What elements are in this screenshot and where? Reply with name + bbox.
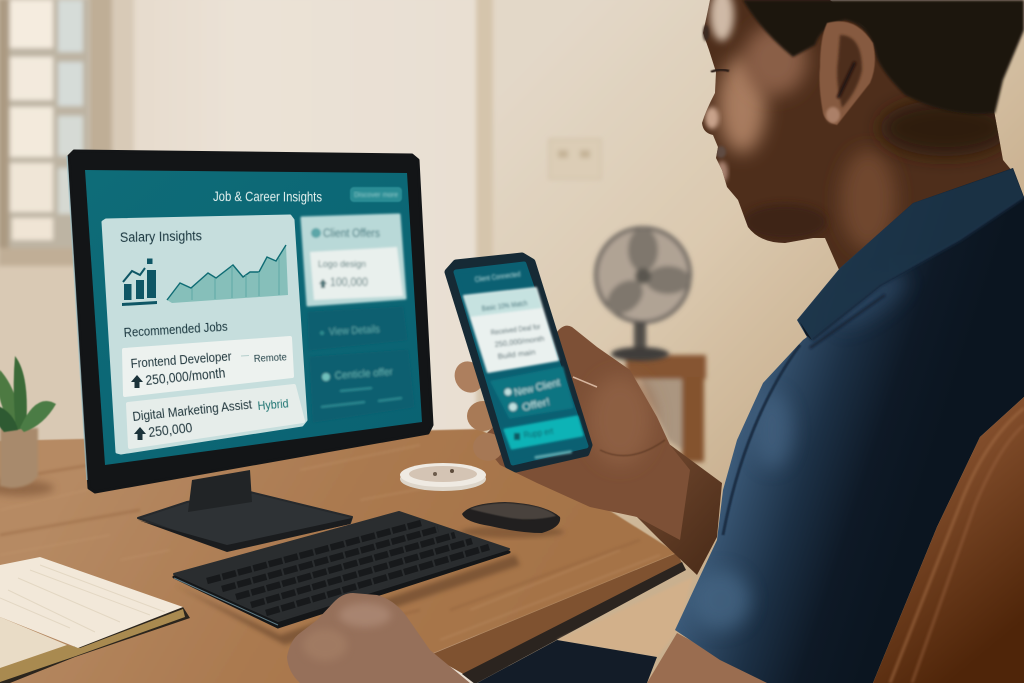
chair: [873, 397, 1024, 683]
phone body: [448, 256, 589, 469]
panel: client offers: Client Offers: [323, 228, 380, 240]
desk fan: [596, 228, 690, 361]
monitor screen: [85, 170, 422, 465]
phone message card: Build main: [497, 347, 536, 361]
phone: [448, 256, 589, 469]
job card: Digital Marketing Assist: Hybrid: [257, 396, 289, 413]
heading: Salary Insights: Salary Insights: [120, 228, 202, 245]
keyboard shadow: [175, 555, 520, 645]
desk surface: [0, 429, 686, 683]
icon: bar chart: [122, 258, 157, 306]
forearm: [630, 430, 722, 575]
lower arm: [647, 633, 770, 683]
panel: centicle offer: [311, 351, 413, 421]
eyebrow: [703, 25, 709, 41]
phone new client card: New Client: [513, 377, 562, 399]
header pill: [350, 187, 402, 202]
phone message card: 250,000/month: [494, 334, 545, 349]
desk front edge: [430, 553, 682, 675]
panel: salary insights and recommended jobs: [103, 216, 306, 453]
job card: Frontend Developer: Remote: [254, 351, 287, 365]
floor behind desk: [557, 577, 693, 657]
hair: [743, 0, 1024, 114]
side table: [626, 355, 706, 462]
potted plant: [0, 356, 56, 496]
heading: Job & Career Insights: Job & Career Insights: [213, 188, 322, 205]
heading: Recommended Jobs: Recommended Jobs: [123, 320, 228, 340]
window with white frame: [0, 0, 110, 266]
finger: ring: [473, 433, 503, 461]
panel: centicle offer: Centicle offer: [334, 366, 394, 382]
job card: Digital Marketing Assist: [128, 386, 303, 447]
monitor: [67, 151, 432, 492]
panel: client offers: [302, 215, 405, 305]
icon: up arrow: [131, 375, 143, 388]
phone message card: Received Deal for: [490, 322, 541, 337]
ear: [819, 21, 875, 125]
phone screen: [456, 264, 586, 463]
phone button: [505, 417, 582, 448]
panel: client offers: Logo design: [318, 259, 366, 270]
phone message card: [464, 288, 558, 372]
desk dark underside: [462, 562, 686, 683]
head and neck: [702, 0, 1013, 272]
man: [477, 0, 1024, 683]
phone new client card: [492, 368, 572, 417]
job card: Frontend Developer: Frontend Developer: [130, 349, 232, 371]
job card: Digital Marketing Assist: 250,000: [148, 420, 193, 440]
button: view details: [309, 308, 406, 349]
phone new client card: Offer!: [521, 396, 551, 414]
monitor stand: [138, 470, 352, 552]
wall socket: [549, 139, 601, 179]
job card: Digital Marketing Assist: Digital Marketing Assist: [132, 397, 253, 424]
phone: Client Connected: [474, 269, 521, 284]
notebook: [0, 557, 190, 683]
finger: middle: [467, 401, 499, 431]
panel: client offers: 100,000: [330, 277, 368, 289]
job card: Frontend Developer: 250,000/month: [145, 365, 226, 388]
button: view details: View Details: [329, 323, 380, 338]
monitor bezel: [69, 151, 432, 492]
shirt: [675, 168, 1024, 683]
area chart: [167, 245, 288, 303]
hand holding phone: [450, 326, 690, 540]
hand on keyboard: [287, 593, 470, 683]
phone button: Rupp ert: [523, 426, 554, 440]
mouse: [460, 502, 564, 538]
header pill: Discover more: [354, 192, 398, 199]
trousers: [477, 640, 657, 683]
finger: index: [450, 357, 488, 397]
ceramic dish: [400, 463, 486, 491]
job card: Frontend Developer: [124, 338, 292, 395]
phone message card: Basic 10% Match: [481, 298, 528, 313]
icon: up arrow: [134, 427, 146, 440]
eye: [711, 70, 729, 72]
keyboard: [174, 512, 509, 627]
